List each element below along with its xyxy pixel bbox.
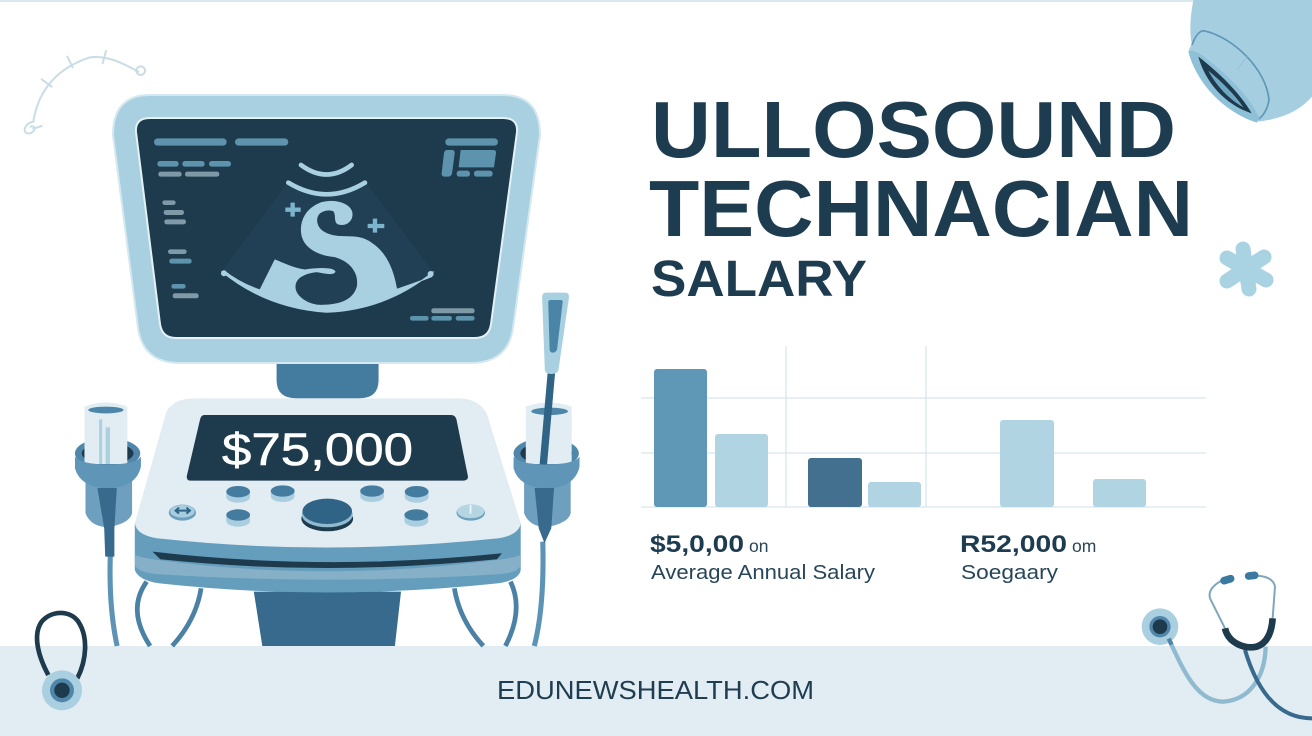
icon: transducer probe top right [1188, 0, 1312, 123]
title [649, 85, 1193, 307]
monitor frame [113, 95, 540, 363]
machine body base [135, 523, 521, 592]
console buttons [169, 485, 485, 531]
right probe holder [514, 293, 580, 646]
ultrasound machine lower unit [75, 293, 580, 646]
machine pedestal [254, 592, 401, 646]
monitor neck [277, 357, 379, 398]
standing probe [539, 293, 569, 467]
screen scan image [221, 165, 434, 312]
right knob [456, 505, 485, 521]
display salary figure: $75,000 [222, 424, 413, 475]
title: SALARY [651, 250, 867, 307]
title: TECHNACIAN [649, 164, 1193, 253]
icon: stethoscope left [37, 613, 85, 710]
bar chart [641, 346, 1206, 507]
salary display [187, 415, 468, 481]
icon: stethoscope right [1142, 575, 1312, 718]
screen readouts [154, 138, 498, 321]
icon: asterisk [1227, 249, 1266, 289]
bars [654, 369, 707, 507]
stat label: secondary salary [960, 531, 1096, 584]
stat label: average annual salary: on [749, 536, 768, 556]
footer band [0, 646, 1312, 736]
ultrasound monitor [113, 95, 540, 363]
machine cables [137, 582, 516, 646]
stat label: average annual salary: $5,0,00 [650, 531, 744, 558]
machine front slot [152, 552, 502, 568]
stat label: average annual salary [650, 531, 876, 584]
stat label: secondary salary: om [1072, 536, 1096, 556]
stat label: secondary salary: R52,000 [960, 531, 1067, 558]
stat label: average annual salary: Average Annual Salary [651, 561, 876, 584]
scan waves [288, 165, 365, 194]
scan sector [222, 183, 433, 307]
left knob [169, 505, 196, 521]
monitor screen [136, 118, 517, 338]
footer website text: EDUNEWSHEALTH.COM [497, 677, 814, 705]
central dial [301, 506, 353, 531]
console top surface [135, 398, 521, 547]
stat label: secondary salary: Soegaary [961, 561, 1059, 584]
title: ULLOSOUND [651, 85, 1176, 174]
left probe holder [75, 402, 141, 646]
plus markers [285, 203, 384, 233]
scan S-shaped anatomy [222, 201, 433, 312]
icon: suture arc decoration [25, 51, 145, 133]
